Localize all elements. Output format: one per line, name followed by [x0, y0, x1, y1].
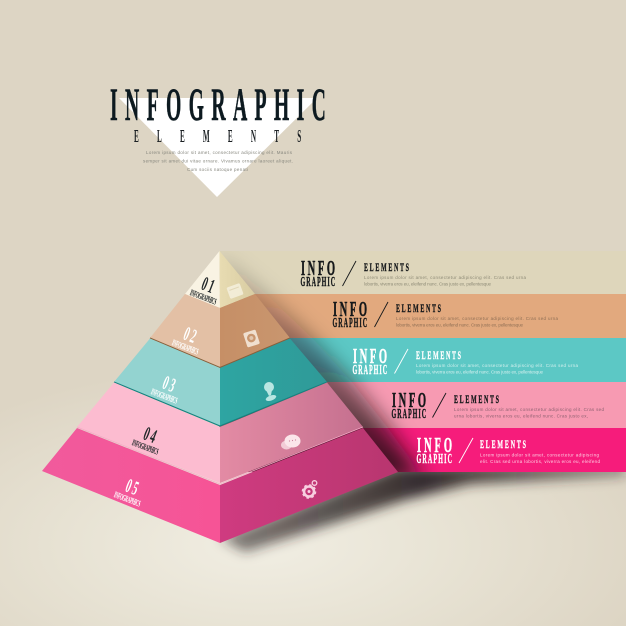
band 1 text: INFO — [301, 256, 335, 280]
label 03: 03 — [159, 372, 178, 397]
band 1 text: Lorem ipsum dolor sit amet, consectetur adipiscing elit. Cras sed urna — [364, 275, 526, 280]
icon: disc box — [243, 329, 260, 348]
label 03: INFOGRAPHICS — [149, 387, 179, 406]
band 2 text: ELEMENTS — [396, 303, 441, 316]
label 05 — [112, 473, 149, 509]
icon: gears — [303, 481, 317, 498]
title description: Cum sociis natoque penati — [187, 167, 248, 172]
tier 3 — [114, 338, 327, 426]
band 2 text: INFO — [333, 297, 367, 321]
label 01: 01 — [198, 273, 217, 298]
band 2 text — [332, 297, 558, 331]
band 3 text: ELEMENTS — [416, 350, 461, 363]
band 4 text: GRAPHIC — [392, 408, 426, 422]
title triangle — [119, 98, 317, 197]
band 5 text: ELEMENTS — [480, 439, 526, 452]
label 04: 04 — [140, 423, 159, 448]
band 3 text: INFO — [353, 344, 387, 368]
tier 2 — [150, 294, 290, 368]
subtitle: ELEMENTS — [134, 126, 301, 146]
label 02 — [170, 321, 207, 357]
band 1 text — [300, 256, 526, 290]
band 5 text — [416, 433, 600, 467]
label 05: 05 — [122, 475, 141, 500]
label 03 — [149, 370, 186, 406]
title description: Lorem ipsum dolor sit amet, consectetur adipiscing elit. Mauris — [146, 150, 293, 155]
tier labels — [112, 271, 225, 509]
label 02: INFOGRAPHICS — [170, 338, 200, 357]
band 3 text: lobortis, viverra eros eu, eleifend nunc. Cras justo ex, pellentesque — [416, 370, 543, 374]
tier 5 — [42, 427, 398, 543]
icon: folder — [226, 283, 244, 299]
tier 1 — [185, 251, 255, 308]
band 4 text: ELEMENTS — [454, 394, 499, 407]
band 2 text: GRAPHIC — [332, 317, 367, 331]
label 02: 02 — [180, 323, 199, 348]
title description: semper sit amet dui vitae ornare. Vivamus ornare laoreet aliquet. — [143, 158, 293, 164]
band 3 text: Lorem ipsum dolor sit amet, consectetur adipiscing elit. Cras sed urna — [416, 363, 578, 368]
band 5 text: elit. Cras sed urna lobortis, viverra eros eu, eleifend — [480, 459, 600, 464]
label 01 — [188, 271, 225, 307]
band 2 text: Lorem ipsum dolor sit amet, consectetur adipiscing elit. Cras sed urna — [396, 316, 558, 321]
icon: person pin — [264, 382, 277, 402]
label 04: INFOGRAPHICS — [130, 438, 160, 457]
band 4 text — [392, 388, 604, 422]
band 5 text: INFO — [417, 433, 452, 457]
band 4 text: Lorem ipsum dolor sit amet, consectetur adipiscing elit. Cras sed — [454, 407, 604, 412]
icon: chat bubbles — [281, 434, 300, 450]
label 04 — [130, 421, 167, 457]
label 01: INFOGRAPHICS — [188, 288, 218, 307]
band 3 text: GRAPHIC — [352, 364, 387, 378]
floor shadow — [220, 466, 626, 552]
band 4 text: INFO — [392, 388, 426, 412]
band 1 text: GRAPHIC — [300, 276, 335, 290]
pyramid — [42, 251, 398, 543]
band 1 text: ELEMENTS — [364, 262, 409, 275]
label 05: INFOGRAPHICS — [112, 490, 142, 509]
band 5 text: GRAPHIC — [416, 453, 452, 467]
band 4 text: urna lobortis, viverra eros eu, eleifend nunc. Cras justo ex, — [454, 414, 588, 418]
band 1 text: lobortis, viverra eros eu, eleifend nunc. Cras justo ex, pellentesque — [364, 282, 491, 286]
band shadow — [219, 251, 425, 480]
colored bands — [219, 251, 626, 472]
tier 4 — [77, 382, 363, 483]
band 5 text: Lorem ipsum dolor sit amet, consectetur adipiscing — [480, 452, 599, 458]
title description — [143, 150, 293, 172]
band 2 text: lobortis, viverra eros eu, eleifend nunc. Cras justo ex, pellentesque — [396, 322, 523, 328]
title: INFOGRAPHIC — [110, 78, 326, 130]
band 3 text — [352, 344, 578, 378]
